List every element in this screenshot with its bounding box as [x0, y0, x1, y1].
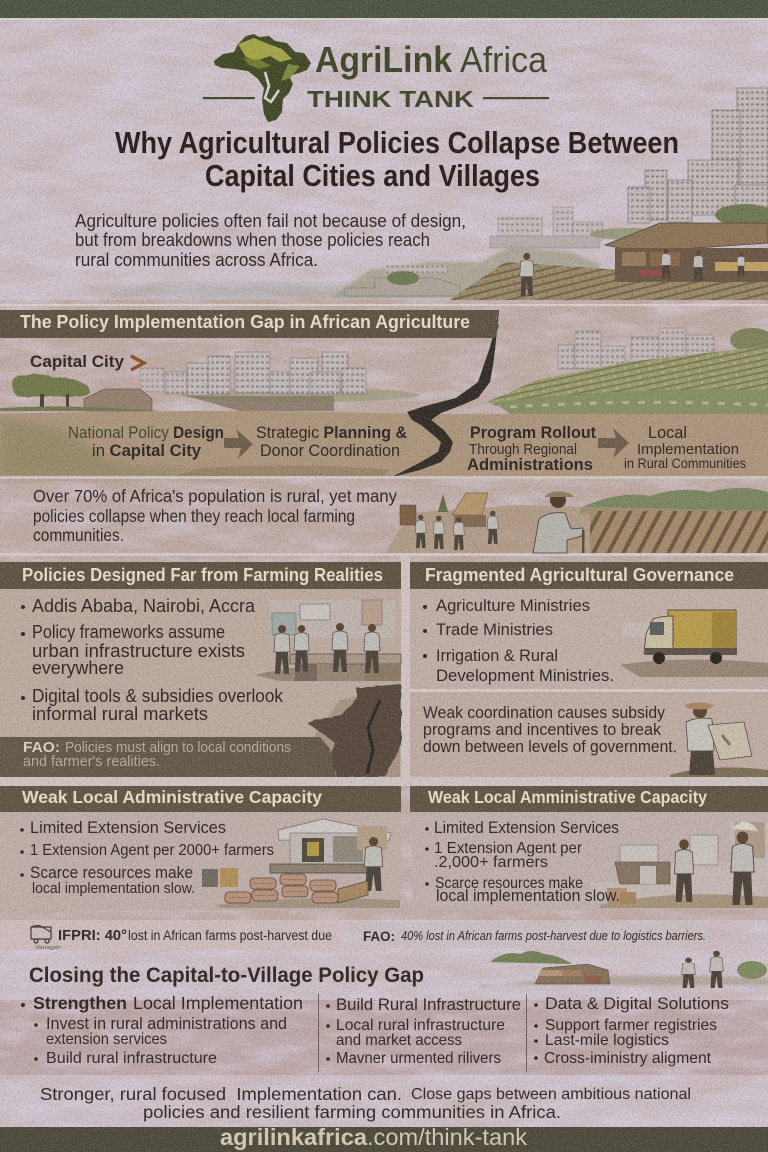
closing statement: Stronger, rural focused Implementation can.: [40, 1084, 402, 1104]
column: data and digital solutions: Support farmer registries: [545, 1017, 717, 1034]
bullets: ministries: Trade Ministries: [436, 620, 553, 639]
bullets: capacity left: local implementation slow.: [32, 880, 195, 897]
bullets: realities: urban infrastructure exists: [32, 641, 245, 661]
column: strengthen local implementation: extension services: [46, 1031, 167, 1048]
header: policies designed far: Policies Designed Far from Farming Realities: [22, 565, 383, 585]
logo: [203, 34, 549, 122]
closing statement: policies and resilient farming communities in Africa.: [143, 1102, 561, 1122]
footer: agrilinkafrica: [220, 1124, 367, 1150]
illustration: city, market and fields hero: [80, 88, 768, 300]
bullets: ministries: Irrigation & Rural: [436, 646, 558, 665]
logo: THINK TANK: [307, 86, 474, 112]
panel: fragmented governance: [410, 562, 768, 777]
intro text: but from breakdowns when those policies reach: [75, 229, 430, 250]
column: strengthen local implementation: Invest in rural administrations and: [46, 1015, 287, 1033]
capital city label: Capital City: [30, 352, 125, 371]
rural statement: Over 70% of Africa's population is rural, yet many: [33, 486, 397, 506]
column: build rural infrastructure: Build Rural Infrastructure: [336, 996, 521, 1014]
panel: rural population: [0, 476, 768, 556]
coordination text: Weak coordination causes subsidy: [423, 704, 666, 722]
flow step: program rollout: Administrations: [467, 455, 593, 474]
icon: truck: [31, 926, 51, 943]
header: weak capacity right: Weak Local Amministrative Capacity: [428, 787, 707, 807]
heading: closing the gap: Closing the Capital-to-Village Policy Gap: [29, 963, 424, 987]
column: data and digital solutions: [526, 994, 729, 1072]
column: build rural infrastructure: [318, 994, 521, 1072]
scene: right farmland and city: [487, 328, 768, 415]
illustration: ground crack: [265, 684, 401, 777]
stat strip: FAO: [352, 922, 708, 948]
bullets: capacity right: .2,000+ farmers: [434, 854, 548, 871]
flow step: program rollout: [467, 423, 596, 474]
callout: FAO: FAO:: [23, 740, 60, 756]
callout: FAO: Policies must align to local conditions: [65, 740, 291, 756]
illustration: delivery truck: [620, 610, 768, 677]
stat strip: IFPRI: IFPRI: 40°: [58, 928, 127, 944]
bullets: capacity right: 1 Extension Agent per: [434, 840, 583, 857]
stat strip: IFPRI: [0, 920, 340, 951]
coordination text: programs and incentives to break: [423, 721, 662, 739]
column: strengthen local implementation: Local Implementation: [133, 993, 303, 1013]
stat strip: IFPRI: Vanagen: [35, 945, 61, 951]
panel: policy implementation gap: [0, 304, 768, 478]
panel: policies designed far: [0, 556, 410, 780]
wordmark: AgriLink: [315, 39, 453, 80]
flow step: strategic planning: Strategic Planning &: [256, 424, 407, 442]
flow step: national policy design: National Policy Design: [68, 424, 224, 442]
closing statement: Close gaps between ambitious national: [411, 1086, 691, 1103]
footer: .com/think-tank: [367, 1124, 528, 1150]
bullets: realities: Addis Ababa, Nairobi, Accra: [32, 596, 256, 616]
rural statement: [33, 486, 397, 545]
bullets: realities: Digital tools & subsidies overlook: [32, 686, 284, 706]
bullets: capacity left: Scarce resources make: [30, 864, 193, 882]
title: Why Agricultural Policies Collapse Between: [115, 125, 679, 160]
bullets: capacity right: [425, 819, 620, 905]
column: build rural infrastructure: Mavner urmented rilivers: [336, 1050, 501, 1067]
bullets: capacity right: Limited Extension Services: [434, 819, 619, 837]
callout: FAO: [0, 737, 336, 777]
column: data and digital solutions: Last-mile logistics: [545, 1032, 669, 1049]
bullets: realities: informal rural markets: [32, 704, 208, 724]
column: strengthen local implementation: Strengthen: [33, 993, 127, 1013]
header: weak capacity left: Weak Local Administrative Capacity: [22, 787, 322, 807]
arrow: flow 1: [224, 429, 253, 459]
bullets: realities: Policy frameworks assume: [32, 622, 225, 642]
bullets: capacity left: 1 Extension Agent per 2000+ farmers: [30, 842, 274, 859]
flow step: local implementation: Local: [648, 424, 687, 442]
logo: Africa: [460, 39, 548, 80]
bullets: capacity left: Limited Extension Services: [30, 818, 226, 837]
bullets: capacity right: local implementation slow.: [436, 887, 620, 905]
bullets: ministries: [423, 596, 614, 685]
callout: FAO: and farmer's realities.: [23, 754, 160, 770]
header: fragmented governance: [410, 562, 768, 589]
column: strengthen local implementation: [21, 993, 303, 1067]
illustration: man with sack: [670, 702, 768, 777]
header: weak capacity left: [0, 786, 401, 812]
flow step: strategic planning: Donor Coordination: [260, 442, 400, 460]
crack: [392, 310, 499, 477]
column: strengthen local implementation: Build rural infrastructure: [46, 1050, 217, 1067]
title: [115, 125, 679, 193]
bullets: ministries: Agriculture Ministries: [436, 596, 590, 615]
flow step: program rollout: Program Rollout: [470, 423, 596, 442]
flow step: national policy design: in Capital City: [92, 442, 202, 460]
bullets: realities: everywhere: [32, 658, 124, 678]
top band: [0, 0, 768, 18]
flow step: local implementation: in Rural Communities: [624, 456, 746, 471]
column: data and digital solutions: Cross-iministry aligment: [544, 1050, 712, 1067]
illustration: workers and storage: [590, 822, 768, 908]
bullets: capacity right: Scarce resources make: [435, 875, 583, 892]
intro text: Agriculture policies often fail not because of design,: [75, 210, 466, 231]
soil band: [0, 411, 768, 478]
illustration: extension shed and sacks: [202, 819, 400, 908]
stat strip: FAO: 40% lost in African farms post-harvest due to logistics barriers.: [401, 928, 706, 943]
panel: weak local capacity left: [0, 777, 768, 910]
scene: farmer and field: [385, 488, 768, 553]
header: policies designed far: [0, 562, 401, 589]
bullets: capacity left: [20, 818, 274, 897]
intro text: rural communities across Africa.: [75, 249, 318, 270]
intro text: [75, 210, 466, 270]
arrow: flow 2: [598, 428, 629, 458]
header: fragmented governance: Fragmented Agricultural Governance: [425, 565, 734, 585]
title: Capital Cities and Villages: [205, 158, 540, 193]
stat strip: FAO: FAO:: [363, 928, 395, 944]
closing statement: [40, 1084, 691, 1122]
footer: [0, 1124, 768, 1152]
rural statement: policies collapse when they reach local farming: [33, 506, 355, 526]
flow step: local implementation: Implementation: [637, 441, 739, 458]
stat strip: IFPRI: lost in African farms post-harvest due: [128, 927, 332, 943]
column: build rural infrastructure: and market access: [336, 1032, 462, 1049]
coordination text: down between levels of government.: [423, 738, 677, 756]
panel: weak local capacity right: [410, 786, 768, 910]
bullets: ministries: Development Ministries.: [436, 666, 614, 685]
header: policy implementation gap: The Policy Implementation Gap in African Agriculture: [20, 311, 470, 332]
illustration: meeting at a bench: [255, 600, 401, 681]
bullets: realities: [21, 596, 284, 724]
column: build rural infrastructure: Local rural infrastructure: [336, 1017, 505, 1034]
scene: left capital city: [0, 352, 420, 411]
logo mark: Africa tree: [214, 34, 311, 122]
column: data and digital solutions: Data & Digital Solutions: [545, 994, 729, 1013]
header: weak capacity right: [410, 786, 768, 812]
illustration: sacks and farmers: [480, 951, 768, 988]
flow step: program rollout: Through Regional: [469, 442, 577, 458]
coordination text: [423, 704, 677, 756]
rural statement: communities.: [33, 525, 124, 545]
flow step: strategic planning: [256, 424, 407, 460]
flow step: national policy design: [68, 424, 224, 460]
flow step: local implementation: [624, 424, 746, 471]
